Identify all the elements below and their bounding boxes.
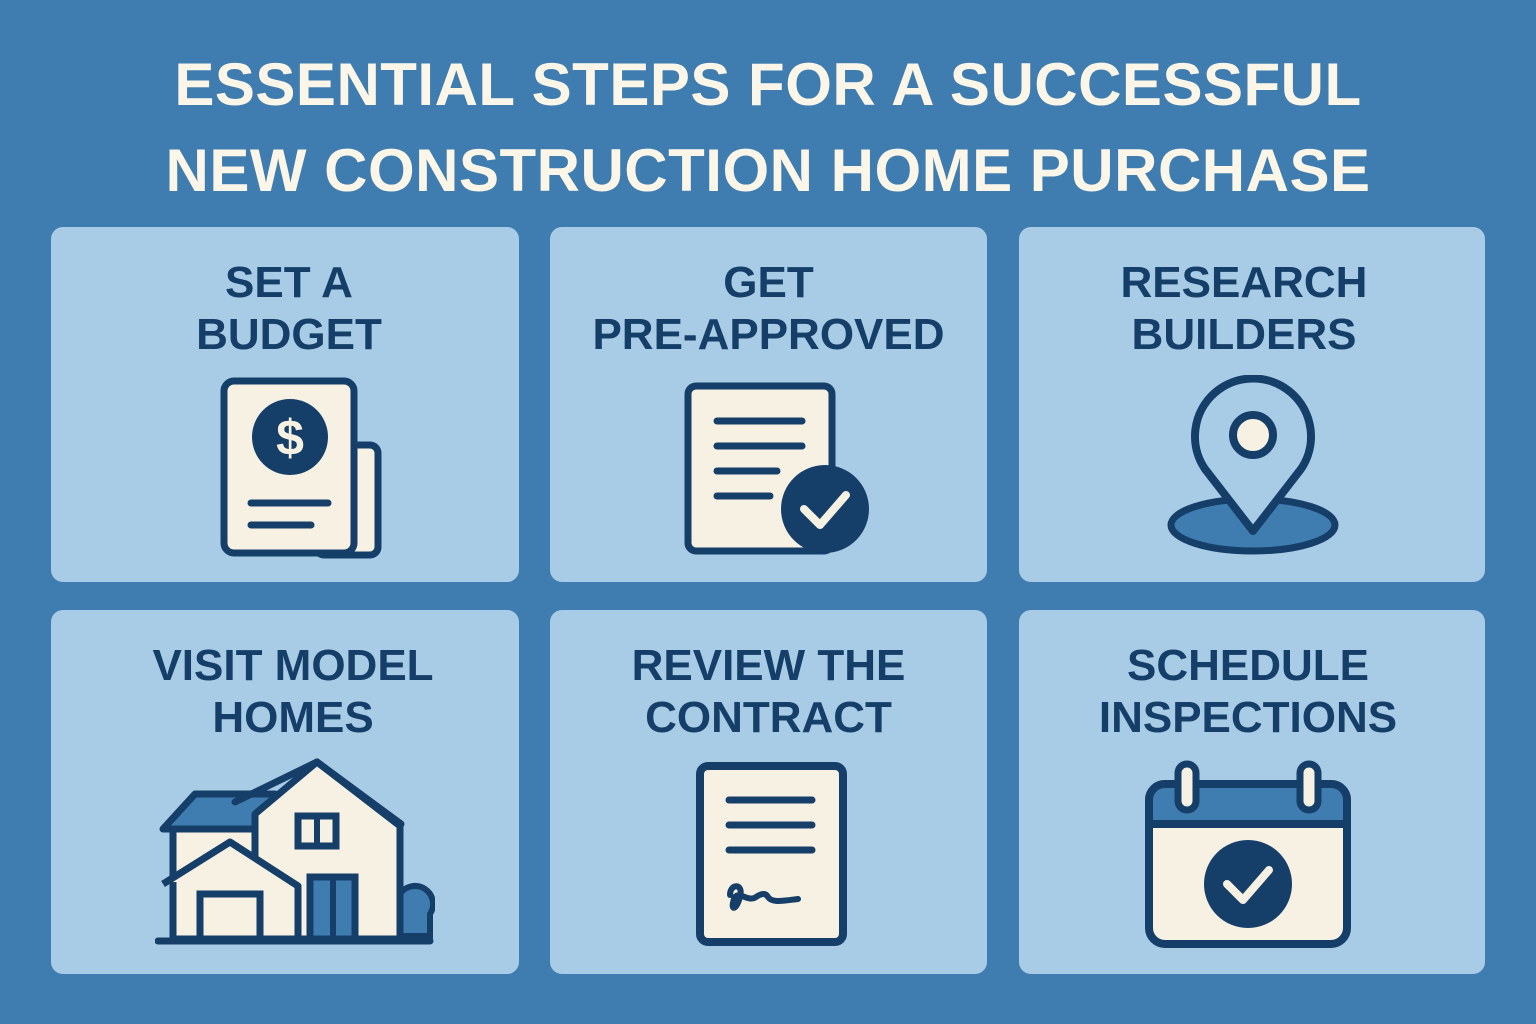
heading: get pre-approved: PRE-APPROVED [592, 310, 945, 359]
heading: visit model homes: VISIT MODEL [152, 641, 434, 690]
heading: research builders: RESEARCH [1121, 258, 1367, 307]
heading: research builders [1121, 258, 1367, 359]
heading: review the contract [632, 641, 905, 742]
icon: map pin [1168, 375, 1338, 554]
heading: visit model homes [152, 641, 434, 742]
heading: review the contract: CONTRACT [645, 693, 892, 742]
heading: research builders: BUILDERS [1132, 310, 1356, 359]
panel: schedule inspections [1019, 610, 1485, 974]
panel: research builders [1019, 227, 1485, 582]
heading: get pre-approved: GET [723, 258, 814, 307]
icon: signed contract [696, 762, 847, 946]
heading: visit model homes: HOMES [212, 693, 374, 742]
heading: schedule inspections: INSPECTIONS [1099, 693, 1397, 742]
title [165, 51, 1370, 204]
panel: get pre-approved [550, 227, 987, 582]
icon: approved document [684, 382, 869, 554]
heading: get pre-approved [592, 258, 945, 359]
heading: schedule inspections [1099, 641, 1397, 742]
panel: visit model homes [51, 610, 519, 974]
icon: budget document [220, 378, 382, 558]
title: ESSENTIAL STEPS FOR A SUCCESSFUL [174, 51, 1362, 118]
title: NEW CONSTRUCTION HOME PURCHASE [165, 137, 1370, 204]
heading: review the contract: REVIEW THE [632, 641, 905, 690]
heading: set a budget [196, 258, 382, 359]
heading: set a budget: BUDGET [196, 310, 382, 359]
panel: set a budget [51, 227, 519, 582]
icon: calendar [1145, 760, 1351, 948]
heading: set a budget: SET A [225, 258, 353, 307]
icon: budget document: $ [276, 410, 304, 466]
icon: house [155, 758, 435, 944]
panel: review the contract [550, 610, 987, 974]
heading: schedule inspections: SCHEDULE [1127, 641, 1369, 690]
